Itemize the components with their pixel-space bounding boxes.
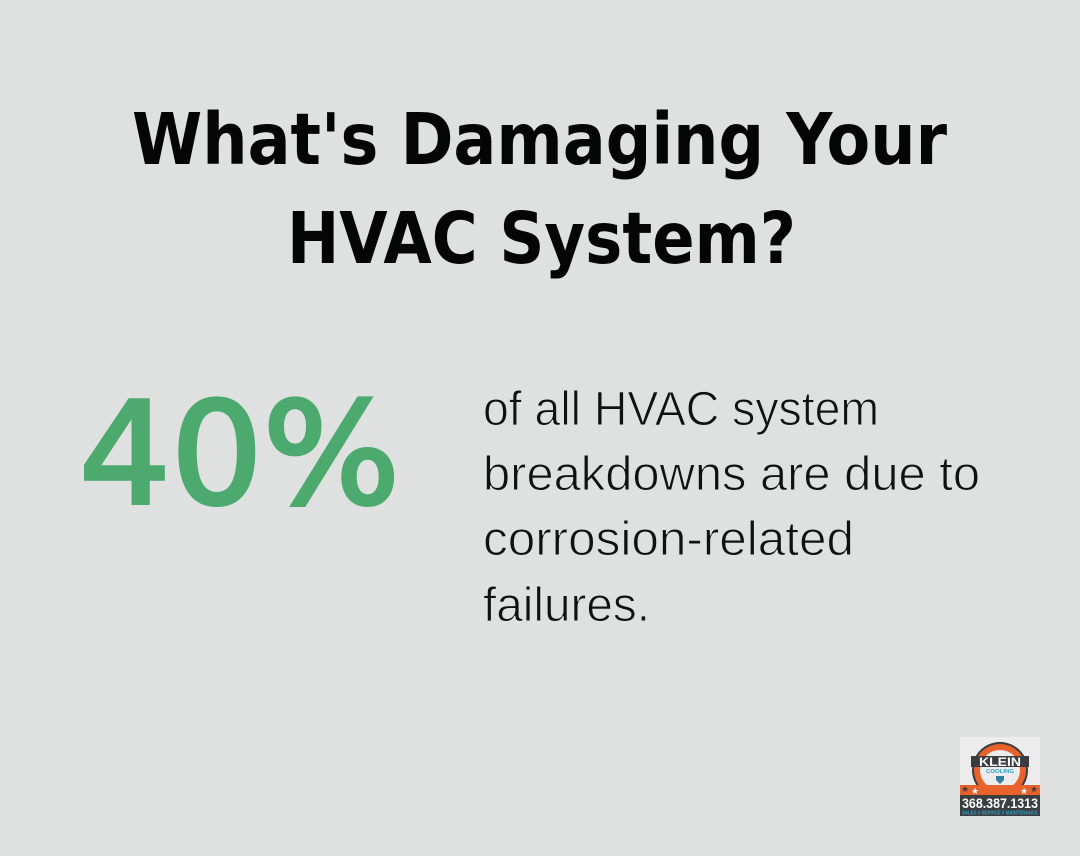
logo orange band (960, 785, 1040, 795)
logo stars: ★ (961, 784, 969, 794)
logo stars: ★ (971, 786, 979, 796)
description text: breakdowns are due to (483, 448, 980, 501)
logo: Klein Cooling badge: SALES // SERVICE // MAINTENANCE (962, 810, 1039, 816)
logo: Klein Cooling badge: COOLING (986, 769, 1014, 775)
logo name plate (971, 756, 1029, 767)
logo shield (996, 776, 1004, 784)
logo: Klein Cooling badge: KLEIN (979, 757, 1021, 769)
title: HVAC System? (287, 197, 796, 280)
description text (483, 383, 980, 632)
title (132, 98, 947, 280)
logo: Klein Cooling badge (960, 737, 1040, 816)
logo stars (961, 784, 1038, 796)
description text: corrosion-related (483, 513, 854, 566)
statistic: 40%: 40% (79, 373, 400, 537)
description text: of all HVAC system (483, 383, 879, 436)
logo phone strip (960, 795, 1040, 816)
logo stars: ★ (1030, 784, 1038, 794)
logo: Klein Cooling badge: 368.387.1313 (962, 796, 1038, 811)
logo stars: ★ (1020, 786, 1028, 796)
title: What's Damaging Your (132, 98, 947, 181)
logo circle (972, 742, 1028, 798)
description text: failures. (483, 579, 650, 632)
